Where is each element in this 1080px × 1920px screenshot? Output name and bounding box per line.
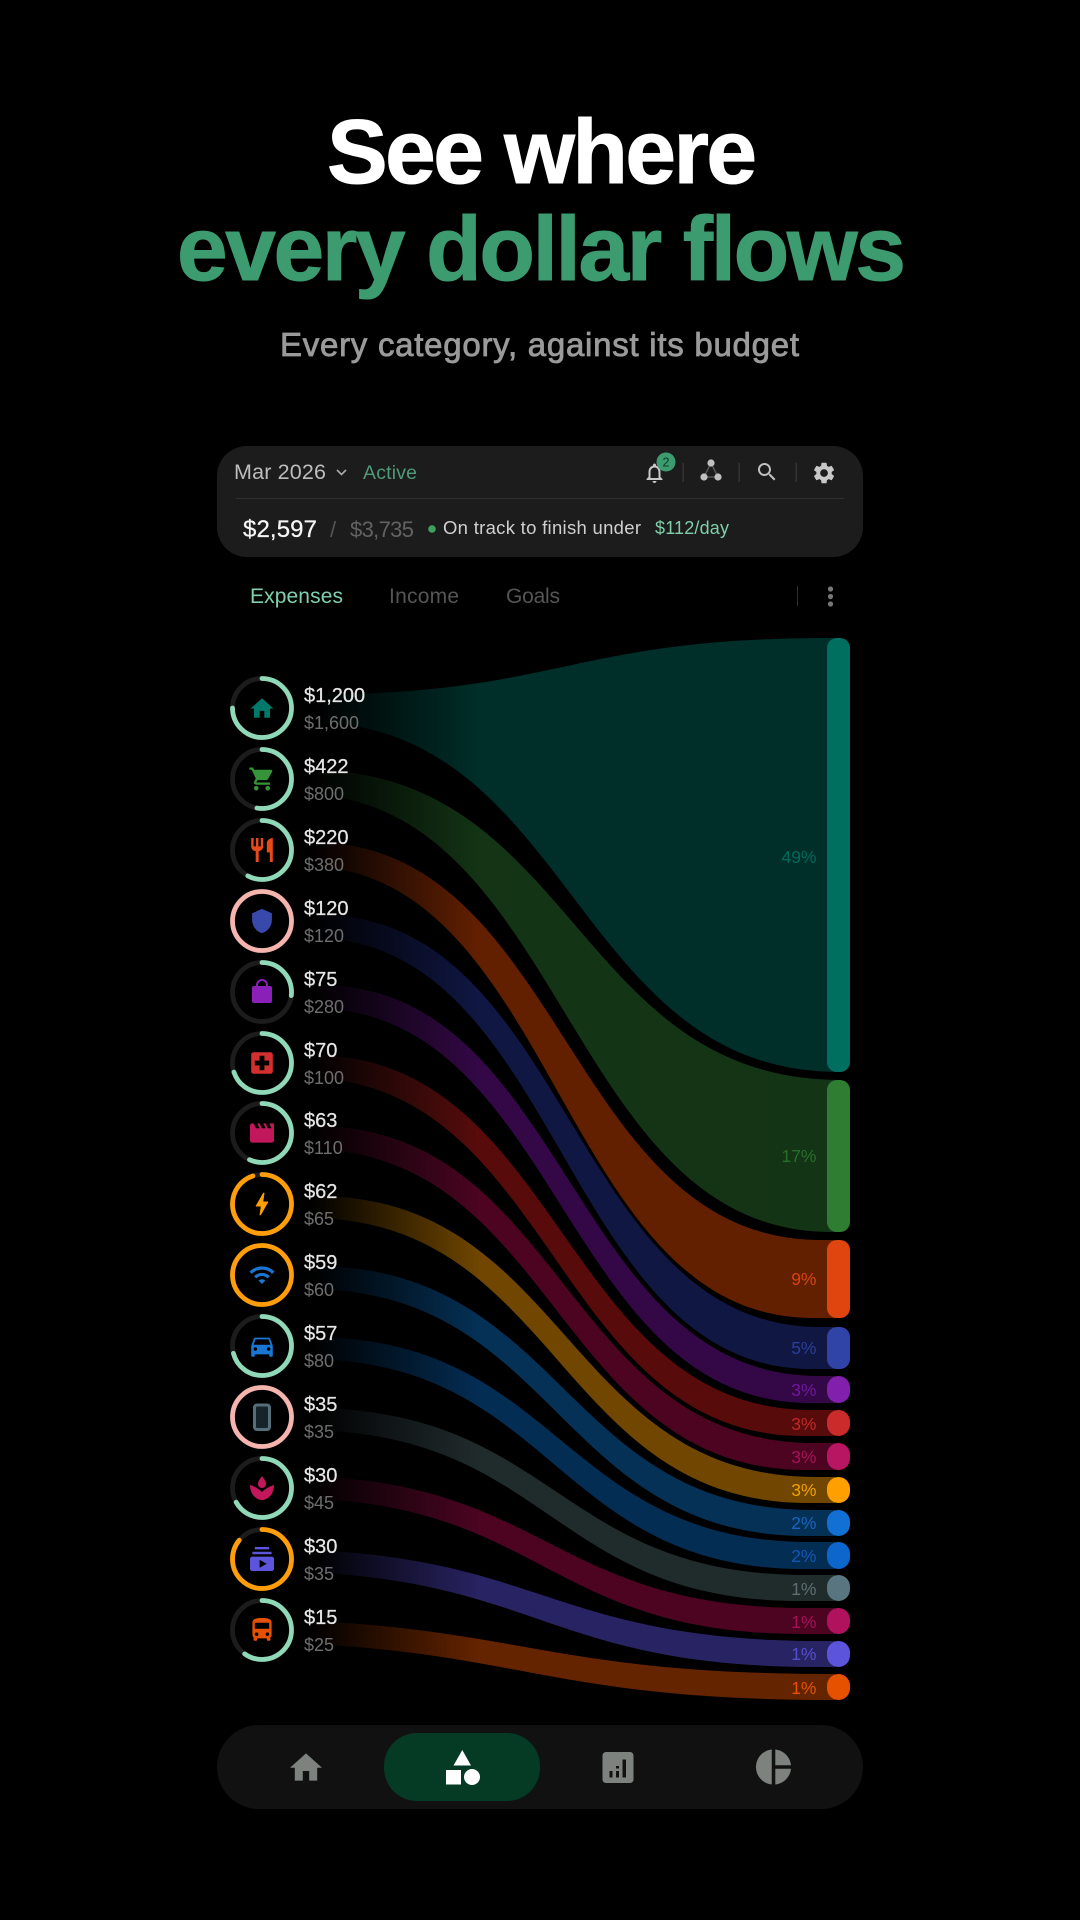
flow: wellness xyxy=(283,1476,835,1634)
category row: insurance: $120 xyxy=(304,898,348,920)
category row: wellness: $30 xyxy=(304,1465,337,1487)
category row: dining xyxy=(232,820,348,880)
month selector: Mar 2026 xyxy=(234,460,326,484)
percentage labels: 9% xyxy=(791,1269,816,1289)
title: headline and subtitle xyxy=(177,102,906,363)
category row: housing xyxy=(232,678,365,738)
panel: month summary header card xyxy=(217,446,863,557)
flow: public transit xyxy=(200,1618,835,1700)
category row: public transit: $25 xyxy=(304,1635,334,1655)
tab: Goals: Goals xyxy=(506,585,560,608)
percentage labels: 3% xyxy=(791,1380,816,1400)
icon: movie clapper xyxy=(250,1123,274,1143)
icon: bus xyxy=(252,1618,272,1641)
icon: nav shapes xyxy=(446,1750,480,1785)
category row: housing: $1,600 xyxy=(304,713,359,733)
category row: transport: $57 xyxy=(304,1323,337,1345)
percentage labels: 5% xyxy=(791,1338,816,1358)
icon: wifi xyxy=(250,1266,274,1284)
icon: bolt xyxy=(256,1193,268,1215)
category row: dining: $380 xyxy=(304,855,344,875)
icon: restaurant xyxy=(251,838,273,862)
flow: health xyxy=(304,1055,835,1436)
active tab pill xyxy=(384,1733,540,1801)
percentage labels: 1% xyxy=(791,1579,816,1599)
category row: subscriptions xyxy=(232,1530,337,1588)
percentage labels: 49% xyxy=(781,847,816,867)
category row: entertainment: $110 xyxy=(304,1138,343,1158)
category row: utilities: $65 xyxy=(304,1209,334,1229)
icon: subscriptions xyxy=(250,1547,274,1571)
icon: network xyxy=(700,459,722,481)
icon: cart xyxy=(249,768,272,790)
category row: phone xyxy=(232,1388,337,1446)
separator slash: / xyxy=(330,517,337,542)
tabs row xyxy=(250,585,833,608)
category row: public transit: $15 xyxy=(304,1607,337,1629)
percentage labels: 3% xyxy=(791,1480,816,1500)
percentage labels: 3% xyxy=(791,1447,816,1467)
flow: shopping xyxy=(311,985,835,1403)
category row: dining: $220 xyxy=(304,827,348,849)
chart: sankey flows xyxy=(200,638,841,1700)
flow: transport xyxy=(304,1337,835,1569)
icon: nav home xyxy=(290,1753,322,1781)
icon: medical cross xyxy=(251,1052,273,1074)
icon: settings gear xyxy=(814,463,834,483)
category row: insurance xyxy=(232,892,348,950)
notification badge: 2 xyxy=(663,456,670,470)
category row: phone: $35 xyxy=(304,1394,337,1416)
flow: subscriptions xyxy=(258,1549,835,1667)
category row: wellness xyxy=(232,1458,337,1518)
flow: groceries xyxy=(299,770,841,1232)
flow: insurance xyxy=(312,915,835,1369)
category row: internet: $60 xyxy=(304,1280,334,1300)
icon: shopping bag xyxy=(252,980,272,1003)
heading line two: every dollar flows xyxy=(177,199,906,300)
category row: utilities xyxy=(232,1174,337,1234)
flow: utilities xyxy=(308,1196,835,1503)
percentage labels: 17% xyxy=(781,1146,816,1166)
category row: subscriptions: $35 xyxy=(304,1564,334,1584)
category row: wellness: $45 xyxy=(304,1493,334,1513)
category row: utilities: $62 xyxy=(304,1181,337,1203)
percentage labels: 3% xyxy=(791,1414,816,1434)
percentage labels xyxy=(781,847,816,1698)
category row: transport: $80 xyxy=(304,1351,334,1371)
status label: Active xyxy=(363,462,417,484)
right-hand share bars xyxy=(827,638,850,1700)
category row: public transit xyxy=(232,1600,337,1660)
category row: phone: $35 xyxy=(304,1422,334,1442)
icon: notification bell xyxy=(646,464,662,483)
icon: overflow menu xyxy=(828,586,833,607)
category row: entertainment xyxy=(232,1104,343,1162)
icon: shield xyxy=(252,909,272,933)
icon: chevron xyxy=(337,470,346,474)
flow: dining xyxy=(303,842,835,1318)
category row: insurance: $120 xyxy=(304,926,344,946)
notification badge xyxy=(656,452,676,472)
category row: housing: $1,200 xyxy=(304,685,365,707)
category row: health: $100 xyxy=(304,1068,344,1088)
category row: groceries: $422 xyxy=(304,756,348,778)
icon: home xyxy=(250,698,274,718)
daily allowance: $112/day xyxy=(655,518,729,538)
category row: health: $70 xyxy=(304,1040,337,1062)
icon: car xyxy=(251,1338,273,1357)
icon: nav report xyxy=(602,1752,634,1783)
tab: Expenses: Expenses xyxy=(250,585,343,608)
flow: housing xyxy=(299,638,839,1072)
icon: phone xyxy=(254,1405,270,1430)
category row: health xyxy=(232,1034,344,1092)
flow: phone xyxy=(300,1408,835,1601)
flow: internet xyxy=(307,1266,835,1536)
status message: On track to finish under xyxy=(443,517,641,538)
category row: groceries xyxy=(232,750,348,808)
category row: internet: $59 xyxy=(304,1252,337,1274)
percentage labels: 2% xyxy=(791,1513,816,1533)
category row: shopping xyxy=(232,962,344,1022)
icon: lotus xyxy=(250,1476,274,1500)
flow: entertainment xyxy=(306,1126,835,1470)
tab: Income: Income xyxy=(389,585,459,608)
percentage labels: 2% xyxy=(791,1546,816,1566)
panel: bottom navigation xyxy=(217,1725,863,1809)
category row: entertainment: $63 xyxy=(304,1110,337,1132)
percentage labels: 1% xyxy=(791,1612,816,1632)
status dot xyxy=(428,525,436,533)
percentage labels: 1% xyxy=(791,1678,816,1698)
category row: transport xyxy=(232,1316,337,1376)
heading line one: See where xyxy=(327,102,757,203)
icon: nav pie chart xyxy=(756,1750,791,1784)
category row: shopping: $280 xyxy=(304,997,344,1017)
category row: internet xyxy=(232,1246,337,1304)
budget total: $3,735 xyxy=(350,517,414,542)
subtitle: Every category, against its budget xyxy=(280,326,799,363)
spent total: $2,597 xyxy=(243,516,317,543)
category row: shopping: $75 xyxy=(304,969,337,991)
percentage labels: 1% xyxy=(791,1644,816,1664)
category row: groceries: $800 xyxy=(304,784,344,804)
icon: search xyxy=(758,463,775,480)
category row: subscriptions: $30 xyxy=(304,1536,337,1558)
